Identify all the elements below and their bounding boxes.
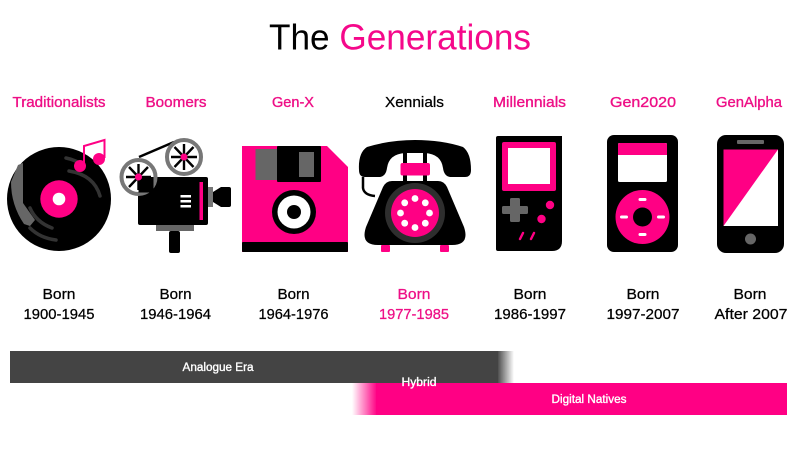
birth years: Born bbox=[514, 287, 546, 303]
generation names: Xennials bbox=[385, 94, 444, 111]
generation names: Millennials bbox=[493, 94, 566, 111]
title: The Generations bbox=[269, 16, 531, 58]
bar: digital natives: Digital Natives bbox=[552, 394, 627, 406]
birth years: Born bbox=[278, 287, 310, 303]
icon: floppy disk bbox=[242, 146, 348, 252]
generation names: Traditionalists bbox=[12, 94, 106, 111]
icon: smartphone bbox=[717, 135, 784, 253]
birth years: Born bbox=[160, 287, 192, 303]
generation names: GenAlpha bbox=[716, 94, 783, 111]
birth years: Born bbox=[734, 287, 766, 303]
birth years: 1900-1945 bbox=[24, 307, 94, 323]
birth years: 1986-1997 bbox=[494, 307, 566, 323]
icon: music note bbox=[74, 140, 105, 172]
birth years: Born bbox=[626, 287, 660, 303]
bar: analogue era: Analogue Era bbox=[182, 362, 254, 374]
birth years: Born bbox=[42, 287, 76, 303]
bar: analogue era bbox=[10, 351, 514, 383]
birth years: After 2007 bbox=[714, 307, 788, 323]
birth years: 1977-1985 bbox=[379, 307, 449, 323]
icon: handheld game console bbox=[496, 136, 562, 251]
birth years: Born bbox=[398, 287, 430, 303]
icon: film camera bbox=[122, 140, 231, 253]
birth years: 1946-1964 bbox=[140, 307, 211, 323]
bar: digital natives bbox=[352, 383, 787, 415]
icon: rotary telephone bbox=[359, 140, 471, 252]
generation names: Boomers bbox=[146, 94, 206, 111]
birth years bbox=[24, 287, 788, 323]
generation names bbox=[12, 94, 783, 111]
generation names: Gen2020 bbox=[610, 94, 676, 111]
birth years: 1997-2007 bbox=[606, 307, 680, 323]
icon: vinyl record bbox=[7, 140, 111, 251]
label: hybrid: Hybrid bbox=[402, 377, 436, 389]
generation names: Gen-X bbox=[272, 94, 314, 111]
birth years: 1964-1976 bbox=[258, 307, 328, 323]
icon: mp3 player bbox=[607, 135, 678, 252]
